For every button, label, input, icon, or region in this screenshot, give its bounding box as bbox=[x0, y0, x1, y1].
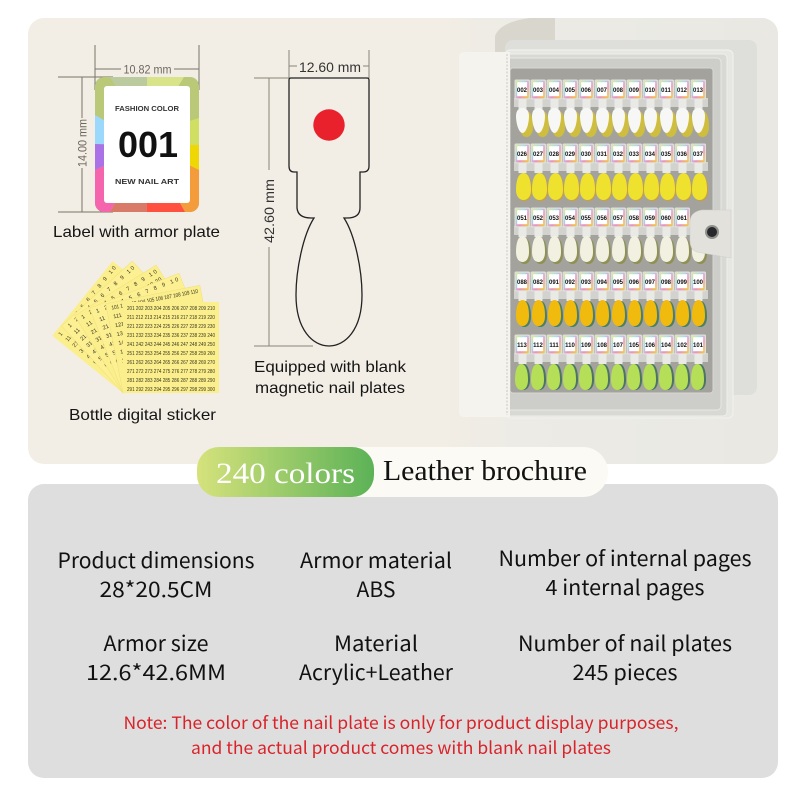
sticker sheet 2: 131 bbox=[116, 330, 127, 338]
cast shadow bbox=[495, 18, 555, 52]
label row 5: 107 bbox=[613, 343, 624, 349]
label row 4: 096 bbox=[629, 280, 640, 286]
light strips under label rows bbox=[514, 98, 708, 362]
sticker sheet 2: 171 bbox=[123, 366, 133, 373]
sticker sheet 1: 291 292 293 294 295 296 297 298 299 300 bbox=[127, 387, 215, 393]
sticker sheet 3: 1 2 3 4 5 6 7 8 9 10 bbox=[95, 277, 179, 315]
label row 4 bbox=[514, 272, 706, 301]
label row 2: 031 bbox=[597, 152, 608, 158]
label row 3: 056 bbox=[597, 216, 608, 222]
sticker sheet 4 bbox=[75, 265, 204, 393]
label row 1: 010 bbox=[645, 88, 656, 94]
brochure plastic pages bbox=[505, 40, 757, 418]
dark tray bbox=[510, 68, 713, 393]
spec: armor material bbox=[300, 545, 452, 604]
label row 5 bbox=[514, 334, 706, 364]
spec: nail plates bbox=[518, 628, 732, 687]
label row 3: 051 bbox=[517, 216, 528, 222]
label row 4: 100 bbox=[693, 280, 704, 286]
caption: sticker: Bottle digital sticker bbox=[69, 407, 217, 424]
dimension: label width bbox=[95, 45, 199, 90]
pill: 240 colors: 240 colors bbox=[216, 457, 355, 490]
spec: nail plates: 245 pieces bbox=[572, 657, 678, 687]
sticker sheet 6: 71 bbox=[107, 369, 115, 377]
label row 3: 060 bbox=[661, 216, 672, 222]
sticker sheet 5: 51 bbox=[98, 354, 106, 362]
leather brochure photo bbox=[430, 18, 778, 464]
armor plate label: NEW NAIL ART bbox=[115, 177, 180, 186]
spec: material: Material bbox=[334, 628, 418, 658]
caption: plate: magnetic nail plates bbox=[255, 380, 405, 397]
sticker sheet 1: 201 202 203 204 205 206 207 208 209 210 bbox=[127, 306, 215, 312]
sticker sheet 4: 71 bbox=[114, 366, 122, 374]
label row 4: 082 bbox=[533, 280, 544, 286]
sticker sheet 3: 81 bbox=[122, 374, 130, 382]
label row 4: 098 bbox=[661, 280, 672, 286]
dimension: plate height bbox=[254, 78, 313, 346]
spec: internal pages: Number of internal pages bbox=[498, 543, 752, 573]
spec: internal pages: 4 internal pages bbox=[546, 572, 705, 602]
label row 1: 011 bbox=[661, 88, 671, 94]
sticker sheet 4: 41 bbox=[100, 343, 108, 351]
sticker sheet 1: 271 272 273 274 275 276 277 278 279 280 bbox=[127, 369, 215, 375]
sticker sheet 4: 81 bbox=[119, 373, 127, 382]
caption: plate: Equipped with blank bbox=[254, 359, 407, 376]
spec: armor size: Armor size bbox=[104, 628, 208, 658]
label row 4: 093 bbox=[581, 280, 592, 286]
spec: material bbox=[299, 628, 454, 687]
note: Note: The color of the nail plate is only for product display purposes, bbox=[124, 709, 678, 734]
sticker sheet 2: 191 bbox=[127, 383, 137, 391]
sticker sheet 2: 111 bbox=[113, 313, 122, 320]
plate outline bbox=[289, 78, 369, 346]
sticker sheet 5: 71 bbox=[110, 367, 118, 376]
spec: armor size bbox=[86, 628, 226, 687]
sticker sheet 6 bbox=[52, 261, 183, 393]
label row 1: 003 bbox=[533, 88, 544, 94]
label row 2 bbox=[514, 144, 706, 173]
spec: nail plates: Number of nail plates bbox=[518, 628, 732, 658]
label row 5: 110 bbox=[565, 343, 575, 349]
label row 1: 009 bbox=[629, 88, 640, 94]
label row 3 bbox=[514, 208, 690, 237]
label row 1: 005 bbox=[565, 88, 576, 94]
sticker sheet 3: 41 bbox=[109, 341, 117, 348]
label row 2: 026 bbox=[517, 152, 528, 158]
label row 2: 028 bbox=[549, 152, 560, 158]
dimension: label height: 14.00 mm bbox=[76, 119, 90, 167]
sticker sheet 5: 11 bbox=[73, 327, 82, 336]
label row 5: 104 bbox=[661, 343, 672, 349]
label row 1 bbox=[514, 80, 706, 109]
number sticker sheets bbox=[52, 261, 219, 424]
armor plate label: FASHION COLOR bbox=[115, 104, 180, 113]
snap clasp bbox=[690, 210, 731, 258]
sticker sheet 4: 51 bbox=[104, 351, 113, 359]
label row 3: 052 bbox=[533, 216, 544, 222]
leather spine bbox=[459, 52, 510, 417]
sticker sheet 5: 41 bbox=[92, 347, 100, 356]
sticker sheet 2: 121 bbox=[115, 322, 125, 329]
sticker sheet 4: 61 bbox=[109, 358, 118, 367]
sticker sheet 4: 1 2 3 4 5 6 7 8 9 10 bbox=[81, 269, 158, 321]
sticker sheet 4: 11 12 13 14 15 16 17 18 19 20 bbox=[85, 277, 163, 328]
label row 3: 058 bbox=[629, 216, 640, 222]
spec: armor size: 12.6*42.6MM bbox=[86, 657, 226, 687]
note bbox=[124, 709, 678, 759]
label row 1: 004 bbox=[549, 88, 560, 94]
heading: leather brochure: Leather brochure bbox=[383, 455, 587, 487]
red magnet dot bbox=[313, 109, 345, 141]
sticker sheet 4: 91 bbox=[124, 381, 132, 390]
nail row 4: amber bbox=[516, 300, 707, 327]
label row 5: 111 bbox=[549, 343, 559, 349]
sticker sheet 5: 21 bbox=[79, 334, 88, 342]
label row 4: 094 bbox=[597, 280, 608, 286]
label row 2: 027 bbox=[533, 152, 544, 158]
sticker sheet 6: 21 bbox=[72, 340, 80, 349]
dimension: label width: 10.82 mm bbox=[124, 62, 172, 76]
pill background bbox=[197, 447, 608, 497]
label row 1: 008 bbox=[613, 88, 624, 94]
sticker sheet 6: 41 bbox=[86, 352, 94, 360]
sticker sheet 1: 261 262 263 264 265 266 267 268 269 270 bbox=[127, 360, 215, 366]
label row 3: 055 bbox=[581, 216, 592, 222]
label row 5: 108 bbox=[597, 343, 608, 349]
label row 2: 035 bbox=[661, 152, 672, 158]
nail row 3: cream bbox=[516, 236, 707, 264]
label row 3: 059 bbox=[645, 216, 656, 222]
label row 2: 029 bbox=[565, 152, 576, 158]
sticker sheet 1: 221 222 223 224 225 226 227 228 229 230 bbox=[127, 324, 215, 330]
spec: product dimensions bbox=[58, 545, 255, 604]
sticker sheet 3: 11 bbox=[99, 316, 106, 323]
nail row 2: yellow bbox=[516, 173, 708, 201]
spec: armor material: ABS bbox=[356, 574, 396, 604]
sticker sheet 2: 141 bbox=[118, 339, 128, 347]
panel: product details top bbox=[28, 18, 778, 464]
armor plate label bbox=[95, 77, 199, 212]
sticker sheet 3: 91 bbox=[125, 382, 133, 390]
sticker sheet 3: 51 bbox=[112, 349, 120, 357]
label row 2: 033 bbox=[629, 152, 640, 158]
label row 4: 095 bbox=[613, 280, 624, 286]
armor plate label: 001 bbox=[118, 124, 178, 165]
label row 3: 057 bbox=[613, 216, 624, 222]
spec: product dimensions: 28*20.5CM bbox=[100, 574, 212, 604]
label row 3: 053 bbox=[549, 216, 560, 222]
sticker sheet 2 bbox=[106, 285, 217, 393]
label row 1: 002 bbox=[517, 88, 528, 94]
spec: material: Acrylic+Leather bbox=[299, 657, 454, 687]
label row 3: 054 bbox=[565, 216, 576, 222]
note: and the actual product comes with blank nail plates bbox=[191, 734, 611, 759]
label row 4: 099 bbox=[677, 280, 688, 286]
nail row 5: lime bbox=[515, 364, 706, 390]
label row 1: 013 bbox=[693, 88, 704, 94]
sticker sheet 3: 31 bbox=[105, 332, 113, 340]
sticker sheet 6: 91 bbox=[121, 380, 129, 388]
sticker sheet 4: 21 bbox=[90, 328, 99, 336]
sticker sheet 3: 21 bbox=[102, 324, 110, 332]
sticker sheet 3: 71 bbox=[118, 366, 126, 373]
label row 2: 036 bbox=[677, 152, 688, 158]
sticker sheet 6: 51 bbox=[93, 357, 101, 366]
label row 5: 106 bbox=[645, 343, 656, 349]
label row 5: 102 bbox=[677, 343, 688, 349]
label row 5: 101 bbox=[693, 343, 704, 349]
label row 4: 097 bbox=[645, 280, 656, 286]
sticker sheet 6: 1 2 3 4 5 6 7 8 9 10 bbox=[58, 265, 118, 338]
spec: armor material: Armor material bbox=[300, 545, 452, 575]
sticker sheet 1: 251 252 253 254 255 256 257 258 259 260 bbox=[127, 351, 215, 357]
dimension: plate height: 42.60 mm bbox=[262, 179, 277, 243]
dimension: label height bbox=[58, 77, 113, 212]
pill: 240 colors bbox=[197, 447, 374, 497]
label row 4: 088 bbox=[517, 280, 528, 286]
label row 2: 030 bbox=[581, 152, 592, 158]
label row 1: 007 bbox=[597, 88, 608, 94]
sticker sheet 2: 151 bbox=[120, 348, 130, 356]
panel: specifications bbox=[28, 484, 778, 778]
sticker sheet 3: 61 bbox=[115, 357, 123, 365]
sticker sheet 6: 31 bbox=[79, 346, 87, 355]
label row 5: 105 bbox=[629, 343, 640, 349]
spec: internal pages bbox=[498, 543, 752, 602]
sticker sheet 5: 81 bbox=[116, 374, 125, 382]
blank magnetic nail plate diagram bbox=[254, 50, 407, 397]
label row 4: 091 bbox=[549, 280, 560, 286]
caption: label: Label with armor plate bbox=[53, 224, 220, 241]
spec: product dimensions: Product dimensions bbox=[58, 545, 255, 575]
title pill bbox=[197, 447, 608, 497]
label row 3: 061 bbox=[677, 216, 688, 222]
sticker sheet 4: 31 bbox=[95, 335, 103, 344]
label row 5: 113 bbox=[517, 343, 527, 349]
dimension: plate width: 12.60 mm bbox=[299, 60, 361, 75]
label row 4: 092 bbox=[565, 280, 576, 286]
label row 1: 012 bbox=[677, 88, 688, 94]
sticker sheet 6: 11 bbox=[65, 335, 73, 343]
sticker sheet 5: 31 bbox=[85, 340, 94, 349]
sticker sheet 6: 81 bbox=[114, 374, 122, 383]
sticker sheet 1: 211 212 213 214 215 216 217 218 219 220 bbox=[127, 315, 215, 321]
sticker sheet 5 bbox=[62, 261, 194, 393]
dimension: plate width bbox=[289, 50, 369, 78]
lighter photo backdrop bbox=[606, 18, 778, 464]
label row 1: 006 bbox=[581, 88, 592, 94]
sticker sheet 5: 91 bbox=[122, 380, 131, 389]
caption: plate bbox=[254, 359, 407, 397]
label row 2: 034 bbox=[645, 152, 656, 158]
label row 5: 112 bbox=[533, 343, 543, 349]
sticker sheet 2: 181 bbox=[125, 375, 135, 382]
sticker sheet 6: 61 bbox=[100, 363, 108, 371]
sticker sheet 1: 241 242 243 244 245 246 247 248 249 250 bbox=[127, 342, 215, 348]
label row 2: 037 bbox=[693, 152, 704, 158]
sticker sheet 1: 281 282 283 284 285 286 287 288 289 290 bbox=[127, 378, 215, 384]
sticker sheet 1: 231 232 233 234 235 236 237 238 239 240 bbox=[127, 333, 215, 339]
sticker sheet 3 bbox=[90, 273, 212, 393]
sticker sheet 5: 61 bbox=[104, 360, 112, 369]
armor plate label diagram bbox=[53, 45, 220, 241]
sticker sheet 2: 161 bbox=[121, 357, 132, 365]
label row 2: 032 bbox=[613, 152, 624, 158]
sticker sheet 5: 1 2 3 4 5 6 7 8 9 10 bbox=[67, 265, 136, 329]
sticker sheet 1 bbox=[123, 302, 219, 393]
label row 5: 109 bbox=[581, 343, 592, 349]
sticker sheet 2: 101 102 103 104 105 106 107 108 109 110 bbox=[111, 289, 199, 312]
nail row 1: white bbox=[516, 108, 709, 137]
